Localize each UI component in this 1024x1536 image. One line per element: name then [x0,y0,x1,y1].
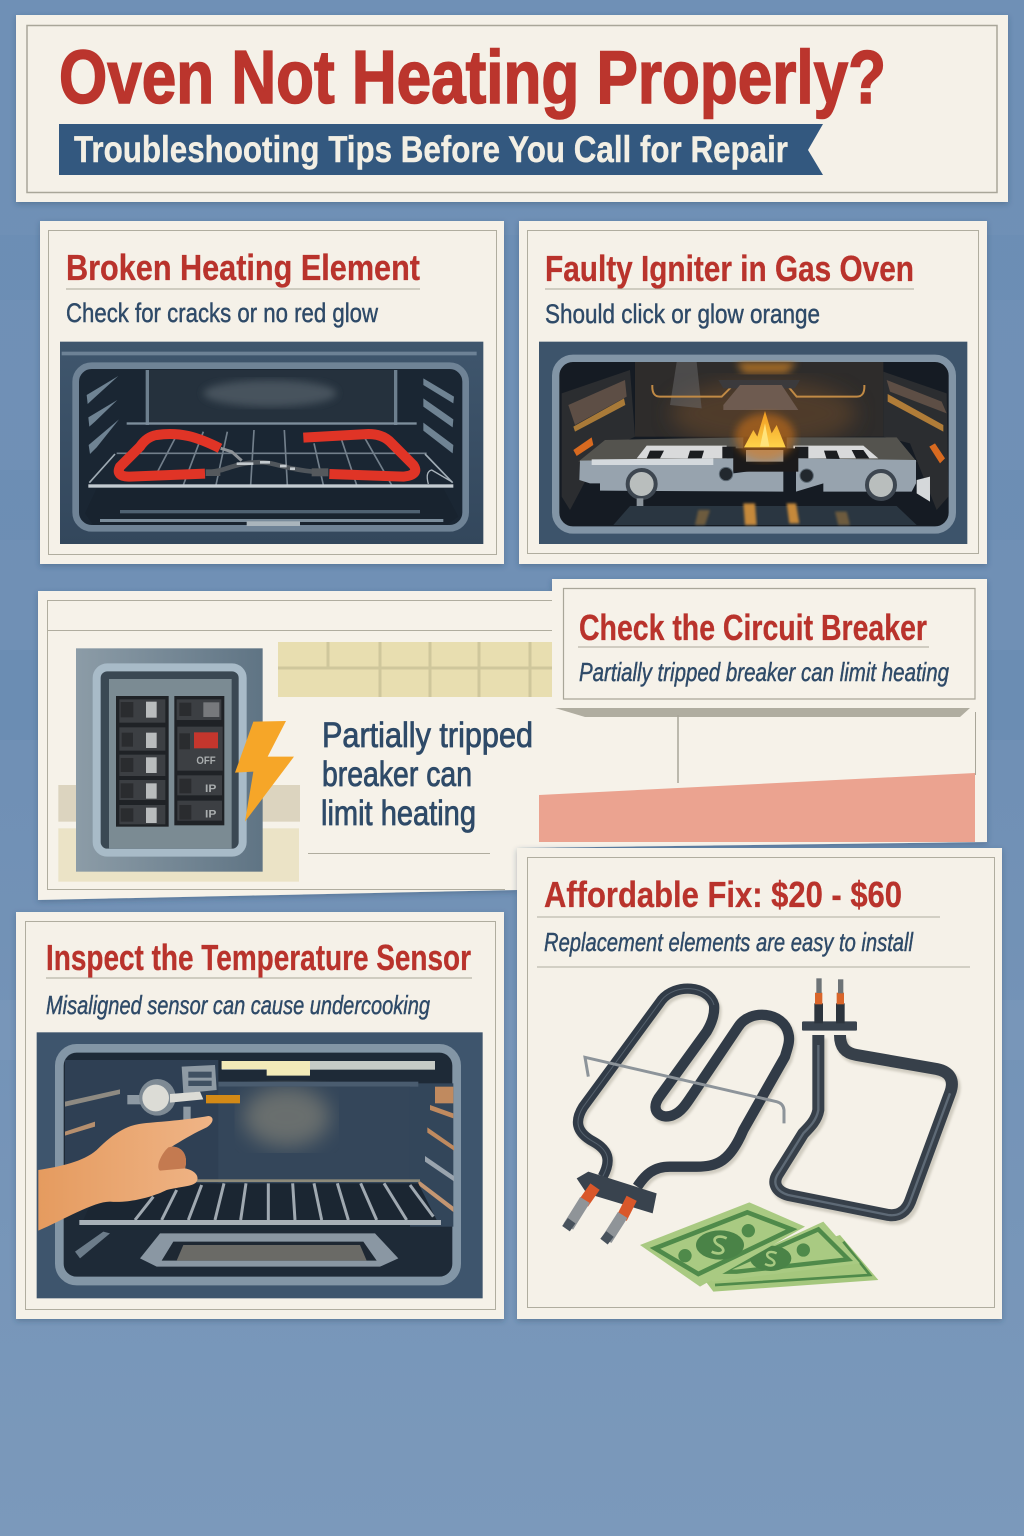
text: partially tripped: limit heating [321,794,476,833]
icon: breaker panel [58,648,300,882]
heading: faulty igniter: Faulty Igniter in Gas Oven [545,248,914,289]
text: partially tripped: breaker can [322,755,472,794]
breaker switch labels: IP [205,783,217,795]
text: partially tripped: Partially tripped [322,716,533,755]
subtitle ribbon: Troubleshooting Tips Before You Call for Repair [74,129,788,170]
panel: check the circuit breaker card [552,579,987,717]
breaker switch labels [196,755,217,820]
hand pointing [38,1116,213,1231]
panel: faulty igniter [519,221,987,564]
heading: check the circuit breaker: Check the Circuit Breaker [579,607,927,648]
panel: temperature sensor [16,912,504,1319]
illustration: heating elements and cash [566,978,954,1292]
breaker switch labels: OFF [196,755,216,767]
icon: rectangular heating element [775,978,954,1219]
panel: header [16,15,1008,202]
text: misaligned sensor: Misaligned sensor can cause undercooking [46,990,430,1020]
panel: circuit breaker background [38,579,987,900]
text: check for cracks: Check for cracks or no red glow [66,298,378,328]
heading: affordable fix: Affordable Fix: $20 - $60 [544,874,902,915]
text: replacement elements: Replacement elements are easy to install [544,927,914,957]
panel: affordable fix [517,848,1002,1319]
text: should click: Should click or glow orange [545,299,820,329]
panel: broken heating element [40,221,504,564]
tile backsplash [278,642,552,697]
icon: dollar bills [640,1202,878,1292]
text: partially tripped [321,716,533,833]
pink wall block [539,773,975,842]
heading: broken heating element: Broken Heating Element [66,247,420,288]
illustration: oven with broken element [60,342,483,544]
illustration: oven with hand pointing at sensor [37,1032,483,1298]
illustration: gas oven igniter flame [539,342,967,544]
breaker switch labels: IP [205,808,217,820]
icon: serpentine heating element [566,989,791,1242]
heading: inspect temperature sensor: Inspect the Temperature Sensor [46,937,471,978]
